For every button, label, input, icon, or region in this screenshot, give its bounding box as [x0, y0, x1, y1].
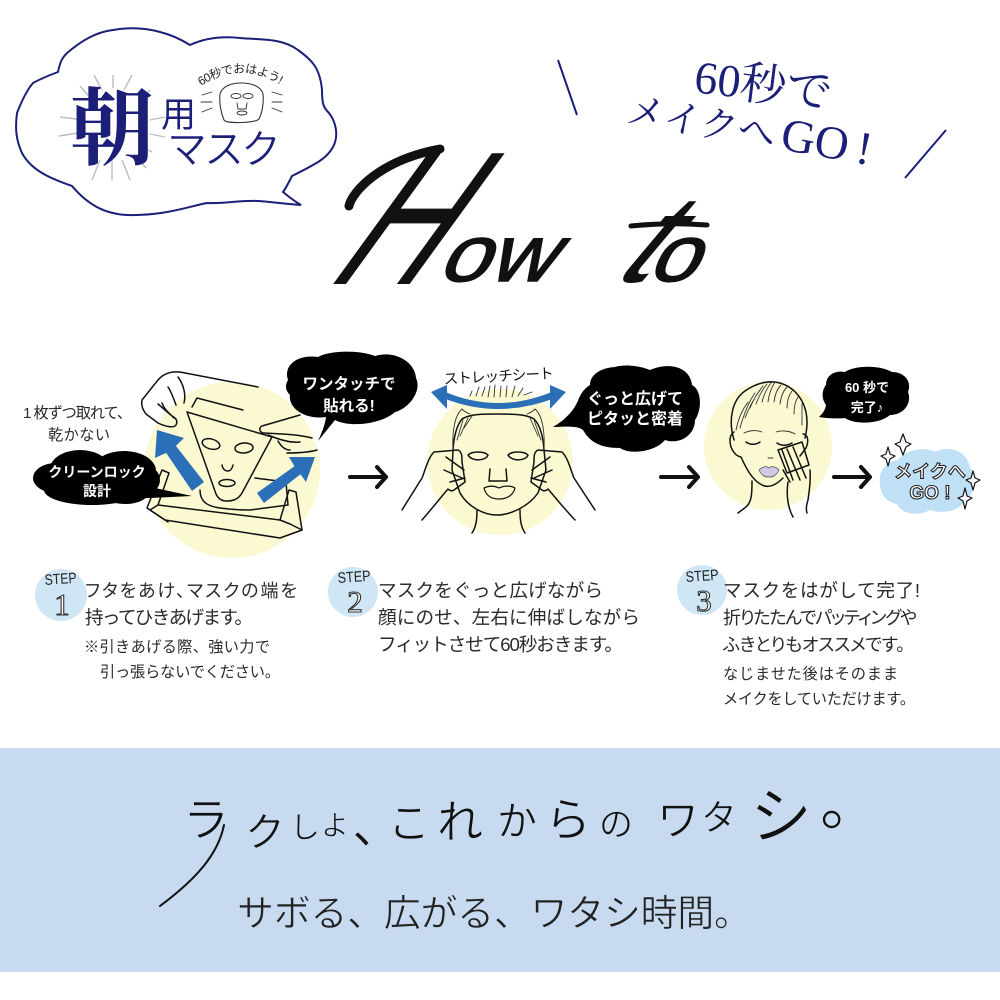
package: [147, 470, 302, 538]
step 1 instructions: フタをあけ、マスクの端を: [85, 581, 297, 601]
step 2 text: [328, 567, 640, 655]
closed eyes: [468, 452, 528, 460]
slogan handwritten: か: [497, 800, 537, 844]
face: [730, 432, 808, 486]
step 3 note: [723, 666, 915, 708]
text: mask: マスク: [167, 128, 281, 172]
badge: go to makeup: [880, 434, 980, 514]
sunburst rays: [59, 75, 165, 180]
neck: [472, 510, 525, 533]
callout: done in 60 seconds: 60 秒で: [845, 380, 889, 395]
slogan handwritten: し: [290, 812, 320, 845]
callout: done in 60 seconds: [819, 367, 909, 423]
yellow circle: [704, 382, 832, 510]
accent slash right: [905, 130, 946, 178]
slogan handwritten: 。: [820, 771, 880, 838]
mask sheet behind: [192, 398, 243, 410]
tissue: [778, 442, 809, 473]
step badge: STEP: [337, 568, 371, 587]
arrow: step 3 to go: [834, 467, 870, 487]
arrow: step 1 to 2: [350, 467, 386, 487]
step badge: 2: [347, 584, 363, 619]
step 2 instructions: フィットさせて60秒おきます。: [378, 634, 623, 655]
callout: one touch: 貼れる!: [323, 396, 375, 415]
caption: good morning in 60 seconds: 60秒でおはよう!: [198, 63, 284, 85]
slogan handwritten: こ: [388, 800, 430, 847]
panel: step 1 illustration: [142, 372, 320, 558]
step badge: 3: [696, 583, 712, 618]
callout: one touch: ワンタッチで: [302, 375, 396, 393]
blue arrow right: [257, 457, 315, 503]
note: pulled one at a time: 乾かない: [48, 427, 110, 444]
title: How to: t: [586, 168, 738, 309]
callout: spread and stick: ぐっと広げて: [587, 390, 683, 408]
step 1 note: ※引きあげる際、強い力で: [84, 639, 270, 656]
panel: step 3 illustration: [704, 382, 832, 517]
left hand: [402, 450, 465, 520]
stretch sheet label: ストレッチシート: [443, 366, 554, 388]
callout: one touch: [286, 352, 418, 441]
step badge: 1: [54, 587, 70, 622]
hair strokes: [470, 385, 532, 397]
slogan handwritten: ワ: [657, 797, 699, 844]
right hand: [531, 450, 595, 520]
title: How to: H: [293, 112, 546, 325]
step 1 instructions: [85, 581, 297, 628]
step 1 note: [84, 639, 280, 681]
slogan handwritten: 、: [352, 798, 402, 854]
step 2 instructions: マスクをぐっと広げながら: [378, 580, 603, 601]
sparkles: [881, 434, 980, 509]
fingers: [782, 447, 810, 513]
hair: [731, 382, 807, 440]
step 3 text: [677, 565, 920, 708]
top hand: [142, 372, 258, 427]
callout: clean lock design: [33, 450, 192, 505]
slogan subline: サボる、広がる、ワタシ時間。: [237, 893, 751, 934]
step 3 instructions: マスクをはがして完了!: [723, 580, 920, 601]
step badge: [35, 569, 87, 622]
tagline line one: 60秒で: [692, 51, 835, 119]
tagline: go to makeup in 60 seconds: [558, 51, 946, 178]
step 3 instructions: ふきとりもオススメです。: [722, 635, 905, 655]
badge: morning mask speech cloud: [15, 27, 338, 216]
callout: clean lock design: クリーンロック: [48, 464, 146, 480]
title: How to: o: [638, 208, 729, 298]
step badge: [328, 567, 378, 619]
note: pulled one at a time: 1 枚ずつ取れて、: [23, 405, 132, 422]
accent slash left: [558, 60, 577, 115]
callout: spread and stick: [553, 366, 700, 452]
face with mask: [452, 414, 546, 515]
background band: [0, 748, 1000, 972]
step 2 instructions: [378, 580, 640, 655]
step 3 note: なじませた後はそのまま: [723, 666, 898, 683]
slogan handwritten: れ: [437, 796, 483, 848]
callout: clean lock design: 設計: [83, 483, 111, 499]
slogan handwritten: シ: [750, 783, 812, 852]
note: pulled one at a time: [23, 405, 132, 444]
step badge: [677, 565, 727, 618]
arrow: step 2 to 3: [661, 467, 698, 487]
slogan handwritten: ラ: [183, 794, 229, 846]
slogan handwritten: タ: [701, 797, 737, 838]
cloud outline: [16, 28, 336, 215]
nose: [768, 457, 773, 459]
step badge: STEP: [44, 570, 77, 589]
stretch sheet arrow: [431, 385, 566, 409]
step 3 note: メイクをしていただけます。: [723, 691, 915, 708]
kanji: morning: 朝: [70, 62, 154, 183]
text: for: 用: [161, 96, 196, 135]
step 3 instructions: 折りたたんでパッティングや: [723, 608, 917, 628]
tagline line two: メイクへGO!: [623, 82, 876, 176]
mask sheet: [187, 412, 272, 501]
yellow circle: [427, 389, 573, 535]
slogan handwritten: ら: [545, 794, 591, 846]
icon: mask face: [201, 83, 282, 123]
blue cloud: [880, 449, 975, 514]
slogan handwritten: [160, 771, 880, 906]
callout: done in 60 seconds: 完了♪: [851, 400, 883, 415]
outlined label: GO !: [909, 483, 951, 504]
step 1 text: [35, 569, 297, 681]
step 3 instructions: [722, 580, 920, 655]
closed eyes: [746, 442, 792, 445]
panel: step 2 illustration: [402, 366, 595, 535]
step 1 note: 引っ張らないでください。: [100, 664, 280, 681]
callout: spread and stick: ピタッと密着: [587, 409, 683, 428]
step 1 instructions: 持ってひきあげます。: [85, 607, 253, 628]
nose: [489, 469, 507, 481]
lips: [759, 467, 779, 477]
step badge: STEP: [685, 567, 719, 586]
title: How to: [293, 112, 738, 325]
yellow circle: [144, 382, 320, 558]
step 2 instructions: 顔にのせ、左右に伸ばしながら: [378, 607, 640, 628]
blue arrow left: [155, 430, 204, 491]
neck: [738, 481, 793, 517]
outlined label: メイクへ: [894, 462, 966, 482]
slogan handwritten: よ: [321, 810, 349, 841]
right hand: [260, 415, 317, 453]
lips: [484, 486, 515, 499]
slogan handwritten: ク: [245, 811, 285, 855]
eyebrows: [744, 431, 795, 434]
title: How to: ow: [428, 208, 585, 298]
slogan handwritten: の: [599, 806, 633, 844]
